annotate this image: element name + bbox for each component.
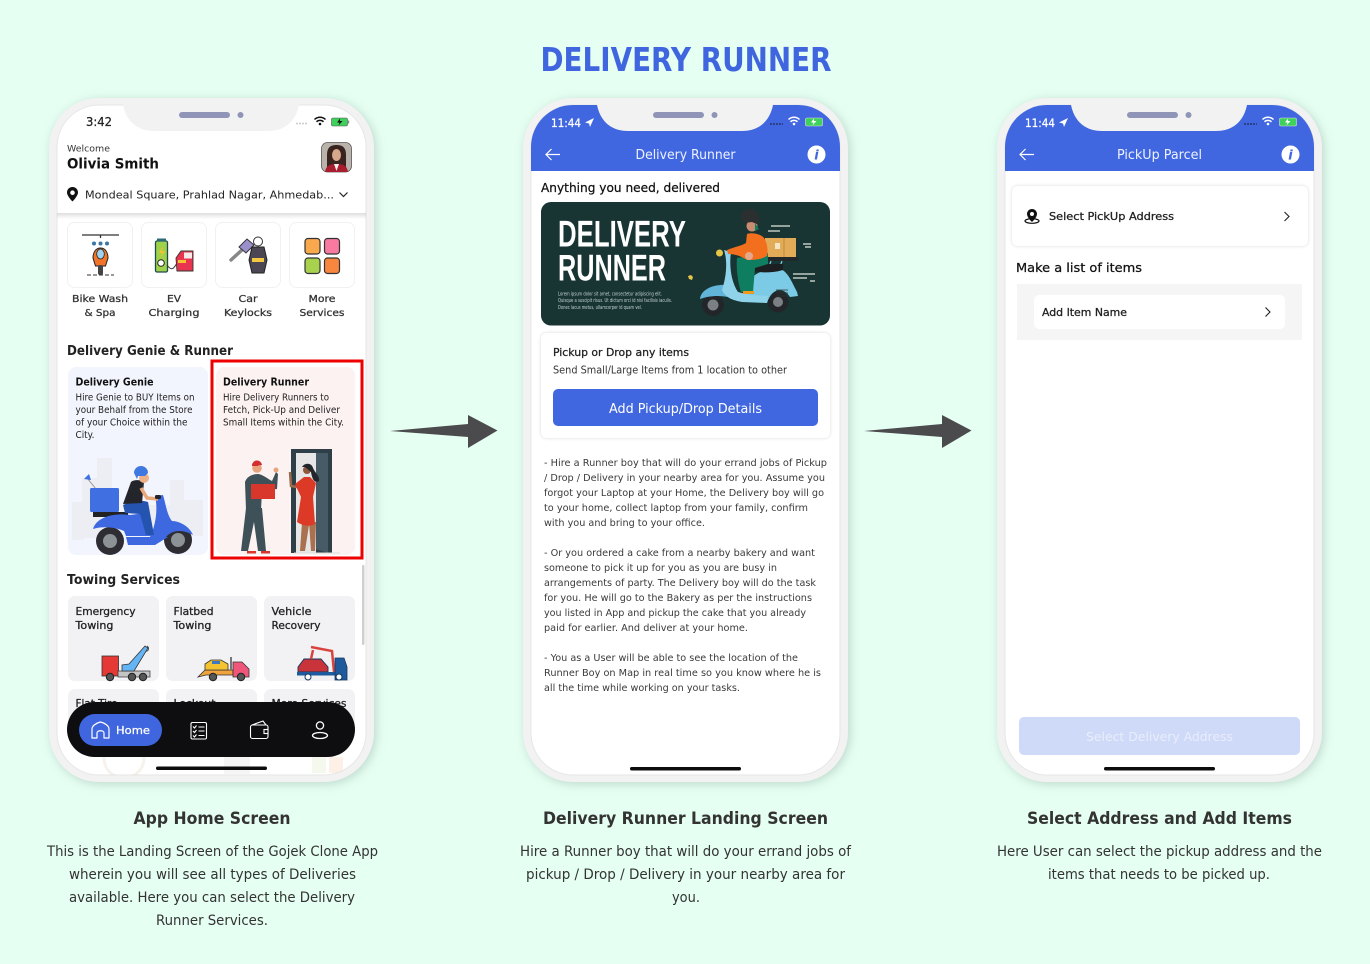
card: delivery genie: City. [76, 430, 94, 441]
app bar: 11:44 [551, 116, 581, 130]
card: delivery runner [216, 367, 355, 555]
notch [597, 104, 773, 131]
icon: info: i [814, 148, 819, 164]
header: greeting and location: Welcome [67, 144, 110, 154]
service tile: bike wash: & Spa [84, 308, 116, 319]
icon: profile [312, 722, 328, 738]
caption: delivery runner landing [520, 809, 852, 906]
icon: location pin [67, 187, 78, 202]
card: delivery runner: Hire Delivery Runners to [223, 392, 329, 404]
service tile: ev charging: EV [167, 294, 181, 305]
app bar: PickUp Parcel [1117, 148, 1202, 163]
bottom navigation bar [67, 702, 355, 757]
text block: description: - You as a User will be able to see the location of the [544, 653, 798, 664]
service tile: more services: More [308, 294, 336, 305]
service tile: car keylocks: Keylocks [224, 308, 272, 319]
icon: info [808, 146, 826, 164]
banner: delivery runner: Quisque a suscipit risus. Ut dictum orci id nisi facilisis iaculis. [558, 298, 672, 304]
app bar: Delivery Runner [636, 148, 736, 163]
icon: profile photo [322, 142, 352, 172]
app bar: 11:44 [1025, 116, 1055, 130]
icon: task list [191, 722, 206, 739]
text block: description: paid for earlier. And deliver at your home. [544, 623, 748, 634]
phone: delivery runner landing [523, 98, 848, 782]
app bar [1005, 105, 1314, 171]
header: greeting and location [57, 142, 366, 219]
button: select delivery address: Select Delivery Address [1086, 729, 1233, 744]
caption: app home screen [46, 809, 378, 929]
home indicator [1104, 767, 1215, 770]
caption: app home screen: Runner Services. [156, 913, 268, 929]
heading: towing services: Towing Services [67, 573, 180, 588]
phone: pickup parcel [997, 98, 1322, 782]
tile: flatbed towing: Towing [172, 620, 212, 632]
banner: delivery runner: Lorem ipsum dolor sit amet, consectetur adipiscing elit. [558, 292, 662, 298]
text block: description: forgot your Laptop at your Home, the Delivery boy will go [544, 488, 824, 499]
tile: vehicle recovery: Recovery [272, 620, 320, 632]
tile: flatbed towing: Flatbed [174, 606, 214, 618]
caption: select address [997, 809, 1322, 883]
service tile: bike wash [68, 222, 132, 319]
card: delivery runner: Small Items within the City. [223, 418, 344, 428]
arrow: landing to address [864, 415, 972, 448]
card: delivery runner: Fetch, Pick-Up and Deliver [223, 405, 340, 416]
panel: add item: Add Item Name [1042, 307, 1127, 319]
service tile: ev charging: Charging [148, 308, 200, 319]
tile: vehicle recovery: Vehicle [272, 606, 312, 618]
service tile: bike wash: Bike Wash [72, 294, 128, 305]
card: pickup or drop: Send Small/Large Items from 1 location to other [553, 364, 788, 376]
caption: select address: Select Address and Add Items [1027, 809, 1292, 829]
heading: delivery genie and runner: Delivery Genie & Runner [67, 343, 233, 359]
text block: description: you listed in App and pickup the cake that you already [544, 608, 806, 619]
device notch [123, 104, 299, 131]
text block: description: Runner Boy on Map in real time so you know where he is [544, 668, 821, 679]
text block: description: for you. He will go to the Bakery as per the instructions [544, 593, 812, 604]
caption: delivery runner landing: Delivery Runner Landing Screen [543, 809, 828, 829]
caption: select address: Here User can select the pickup address and the [997, 844, 1322, 860]
text block: description: with you and bring to your office. [544, 518, 705, 529]
banner: delivery runner: RUNNER [558, 248, 666, 288]
icon: home [92, 722, 109, 738]
tile: vehicle recovery [264, 596, 355, 681]
button: add pickup drop details: Add Pickup/Drop Details [609, 402, 762, 417]
tile: emergency towing [68, 596, 159, 681]
card: delivery genie: of your Choice within the [76, 418, 188, 428]
banner: delivery runner: DELIVERY [558, 214, 686, 254]
caption: select address: items that needs to be picked up. [1048, 867, 1270, 883]
home indicator [156, 766, 267, 770]
service tile: car keylocks [216, 222, 280, 319]
phone: app home screen [49, 98, 374, 782]
tiles: partly hidden second row: Lockout [174, 698, 216, 710]
faint icons beneath nav [102, 757, 343, 775]
notch [1071, 104, 1247, 131]
caption: app home screen: wherein you will see all types of Deliveries [69, 867, 356, 883]
icon: pickup pin [1025, 209, 1039, 223]
service tile: ev charging [142, 222, 206, 319]
tile: emergency towing: Emergency [76, 606, 136, 618]
text block: description [544, 458, 827, 694]
highlight: red selection box [212, 361, 362, 558]
text block: description: all the time while working on your tasks. [544, 683, 740, 694]
button: add pickup drop details [553, 389, 818, 426]
illustration: runner at door [241, 449, 340, 554]
card: delivery genie: your Behalf from the Store [76, 405, 193, 416]
arrow: home to landing [390, 415, 498, 448]
banner: delivery runner [541, 202, 830, 326]
title: DELIVERY RUNNER [540, 40, 832, 79]
tiles: partly hidden second row: Flat Tire [76, 698, 118, 710]
text block: description: someone to pick it up for you as you are busy in [544, 563, 777, 574]
illustration: 3d scooter rider [688, 209, 815, 316]
service tile: car keylocks: Car [238, 294, 258, 305]
card: delivery genie: Hire Genie to BUY Items on [76, 392, 194, 404]
app bar [531, 105, 840, 171]
bottom navigation bar: Home [116, 725, 150, 737]
tile: flatbed towing [166, 596, 257, 681]
caption: delivery runner landing: you. [672, 890, 700, 906]
tiles: partly hidden second row: More Services [272, 698, 346, 710]
status bar [86, 115, 349, 129]
card: select pickup address [1012, 186, 1308, 246]
tile: emergency towing: Towing [74, 620, 114, 632]
caption: delivery runner landing: pickup / Drop / Delivery in your nearby area for [526, 867, 845, 883]
home indicator [630, 767, 741, 770]
card: delivery genie: Delivery Genie [76, 376, 154, 388]
card: delivery genie [68, 367, 208, 555]
button: select delivery address [1019, 717, 1300, 755]
card: delivery runner: Delivery Runner [223, 376, 310, 388]
tiles: partly hidden second row [68, 689, 355, 729]
icon: info [1282, 146, 1300, 164]
card: pickup or drop: Pickup or Drop any items [553, 346, 689, 359]
heading: anything you need: Anything you need, delivered [541, 180, 720, 195]
heading: make a list: Make a list of items [1016, 260, 1142, 275]
card: select pickup address: Select PickUp Address [1049, 211, 1174, 223]
service tile: more services [290, 222, 354, 319]
text block: description: - Hire a Runner boy that will do your errand jobs of Pickup [544, 458, 827, 469]
status bar: 3:42 [86, 115, 112, 129]
banner: delivery runner: Donec lacus metus, ullamcorper id quam vel. [558, 305, 642, 311]
card: pickup or drop [541, 333, 830, 438]
icon: back arrow [546, 149, 560, 160]
caption: app home screen: available. Here you can select the Delivery [69, 890, 355, 906]
header: greeting and location: Olivia Smith [67, 156, 159, 172]
panel: add item [1017, 284, 1302, 340]
service tile: more services: Services [300, 308, 344, 319]
icon: info: i [1288, 148, 1293, 164]
caption: delivery runner landing: Hire a Runner boy that will do your errand jobs of [520, 844, 852, 860]
icon: back arrow [1020, 149, 1034, 160]
text block: description: arrangements of party. The Delivery boy will do the task [544, 578, 816, 589]
caption: app home screen: This is the Landing Screen of the Gojek Clone App [46, 844, 378, 860]
text block: description: to your home, collect laptop from your family, confirm [544, 503, 808, 514]
header: greeting and location: Mondeal Square, Prahlad Nagar, Ahmedab... [85, 188, 334, 202]
icon: wallet [250, 721, 268, 738]
illustration: scooter rider [72, 458, 203, 555]
caption: app home screen: App Home Screen [134, 809, 290, 829]
text block: description: / Drop / Delivery in your nearby area for you. Assume you [544, 473, 825, 484]
text block: description: - Or you ordered a cake from a nearby bakery and want [544, 548, 815, 559]
